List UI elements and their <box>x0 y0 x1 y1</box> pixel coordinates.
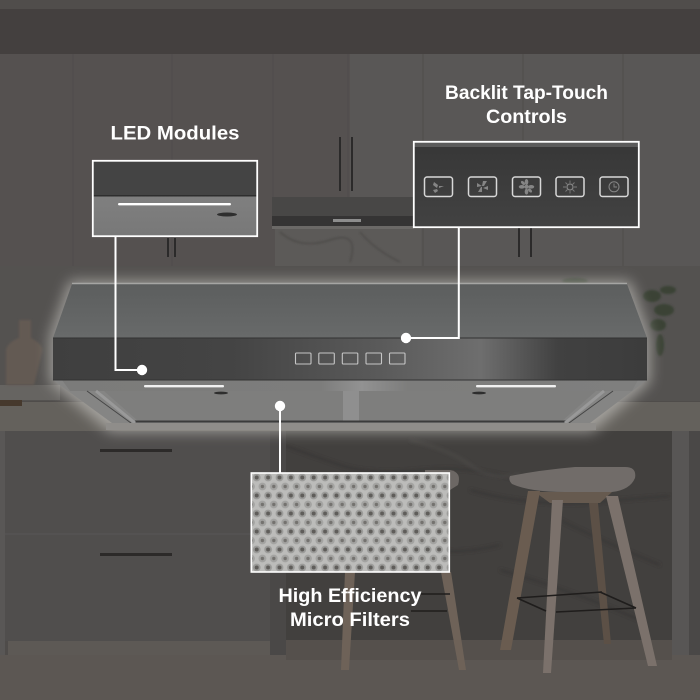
inset: micro filter close-up <box>251 473 450 572</box>
heading: LED Modules: LED Modules <box>110 124 240 144</box>
icon: timer <box>600 177 628 196</box>
inset: control panel close-up <box>414 142 639 227</box>
heading: Backlit Tap-Touch Controls: Backlit Tap-Touch <box>445 83 608 104</box>
anchor dot: filter <box>275 401 285 411</box>
inset: LED module close-up <box>93 161 257 236</box>
heading: High Efficiency Micro Filters: High Efficiency <box>278 586 422 607</box>
backsplash <box>0 229 700 401</box>
anchor dot: LED <box>137 365 147 375</box>
LED strip left <box>144 385 224 387</box>
icon: fan high <box>512 177 540 196</box>
hood front band <box>53 338 647 380</box>
hood underside <box>53 380 647 430</box>
leader line: filter <box>279 406 281 473</box>
anchor dot: controls <box>401 333 411 343</box>
upper cabinets <box>0 54 700 266</box>
callout: LED Modules <box>93 124 257 375</box>
heading: Backlit Tap-Touch Controls <box>445 83 608 128</box>
callout: Backlit Tap-Touch Controls <box>401 83 639 343</box>
island counter <box>0 400 700 657</box>
plant <box>562 278 676 356</box>
leader line: LED <box>116 236 142 370</box>
stool left <box>341 470 466 670</box>
cutting boards <box>6 320 42 385</box>
callout: High Efficiency Micro Filters <box>251 401 450 631</box>
icon: fan medium <box>468 177 496 196</box>
hood glow <box>50 281 650 432</box>
range hood <box>53 284 647 430</box>
icon: fan low <box>424 177 452 196</box>
stool right <box>500 467 657 673</box>
small range hood in background <box>272 197 414 229</box>
leader line: controls <box>406 228 459 338</box>
heading: High Efficiency Micro Filters: Micro Filters <box>290 610 410 631</box>
stools <box>341 467 657 673</box>
heading: High Efficiency Micro Filters <box>278 586 422 631</box>
heading: Backlit Tap-Touch Controls: Controls <box>486 107 567 128</box>
hood top face <box>53 284 647 338</box>
icon: light <box>556 177 584 196</box>
control buttons <box>296 353 405 364</box>
LED strip right <box>476 385 556 387</box>
floor <box>0 640 700 700</box>
